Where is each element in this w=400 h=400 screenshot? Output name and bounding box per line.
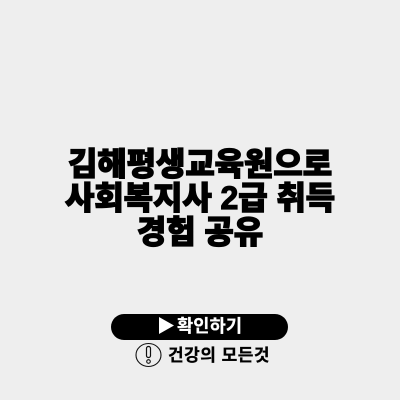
title [64,146,335,250]
source text: 건강의 모든것 [168,346,270,365]
button: confirm [111,314,288,340]
title: 김해평생교육원으로 [68,146,332,182]
title: 사회복지사 2급 취득 [65,180,335,216]
icon: play triangle [159,317,174,334]
button label: 확인하기 [177,316,242,336]
icon: exclamation circle [135,343,162,367]
source line [135,343,270,367]
title: 경험 공유 [137,214,263,250]
